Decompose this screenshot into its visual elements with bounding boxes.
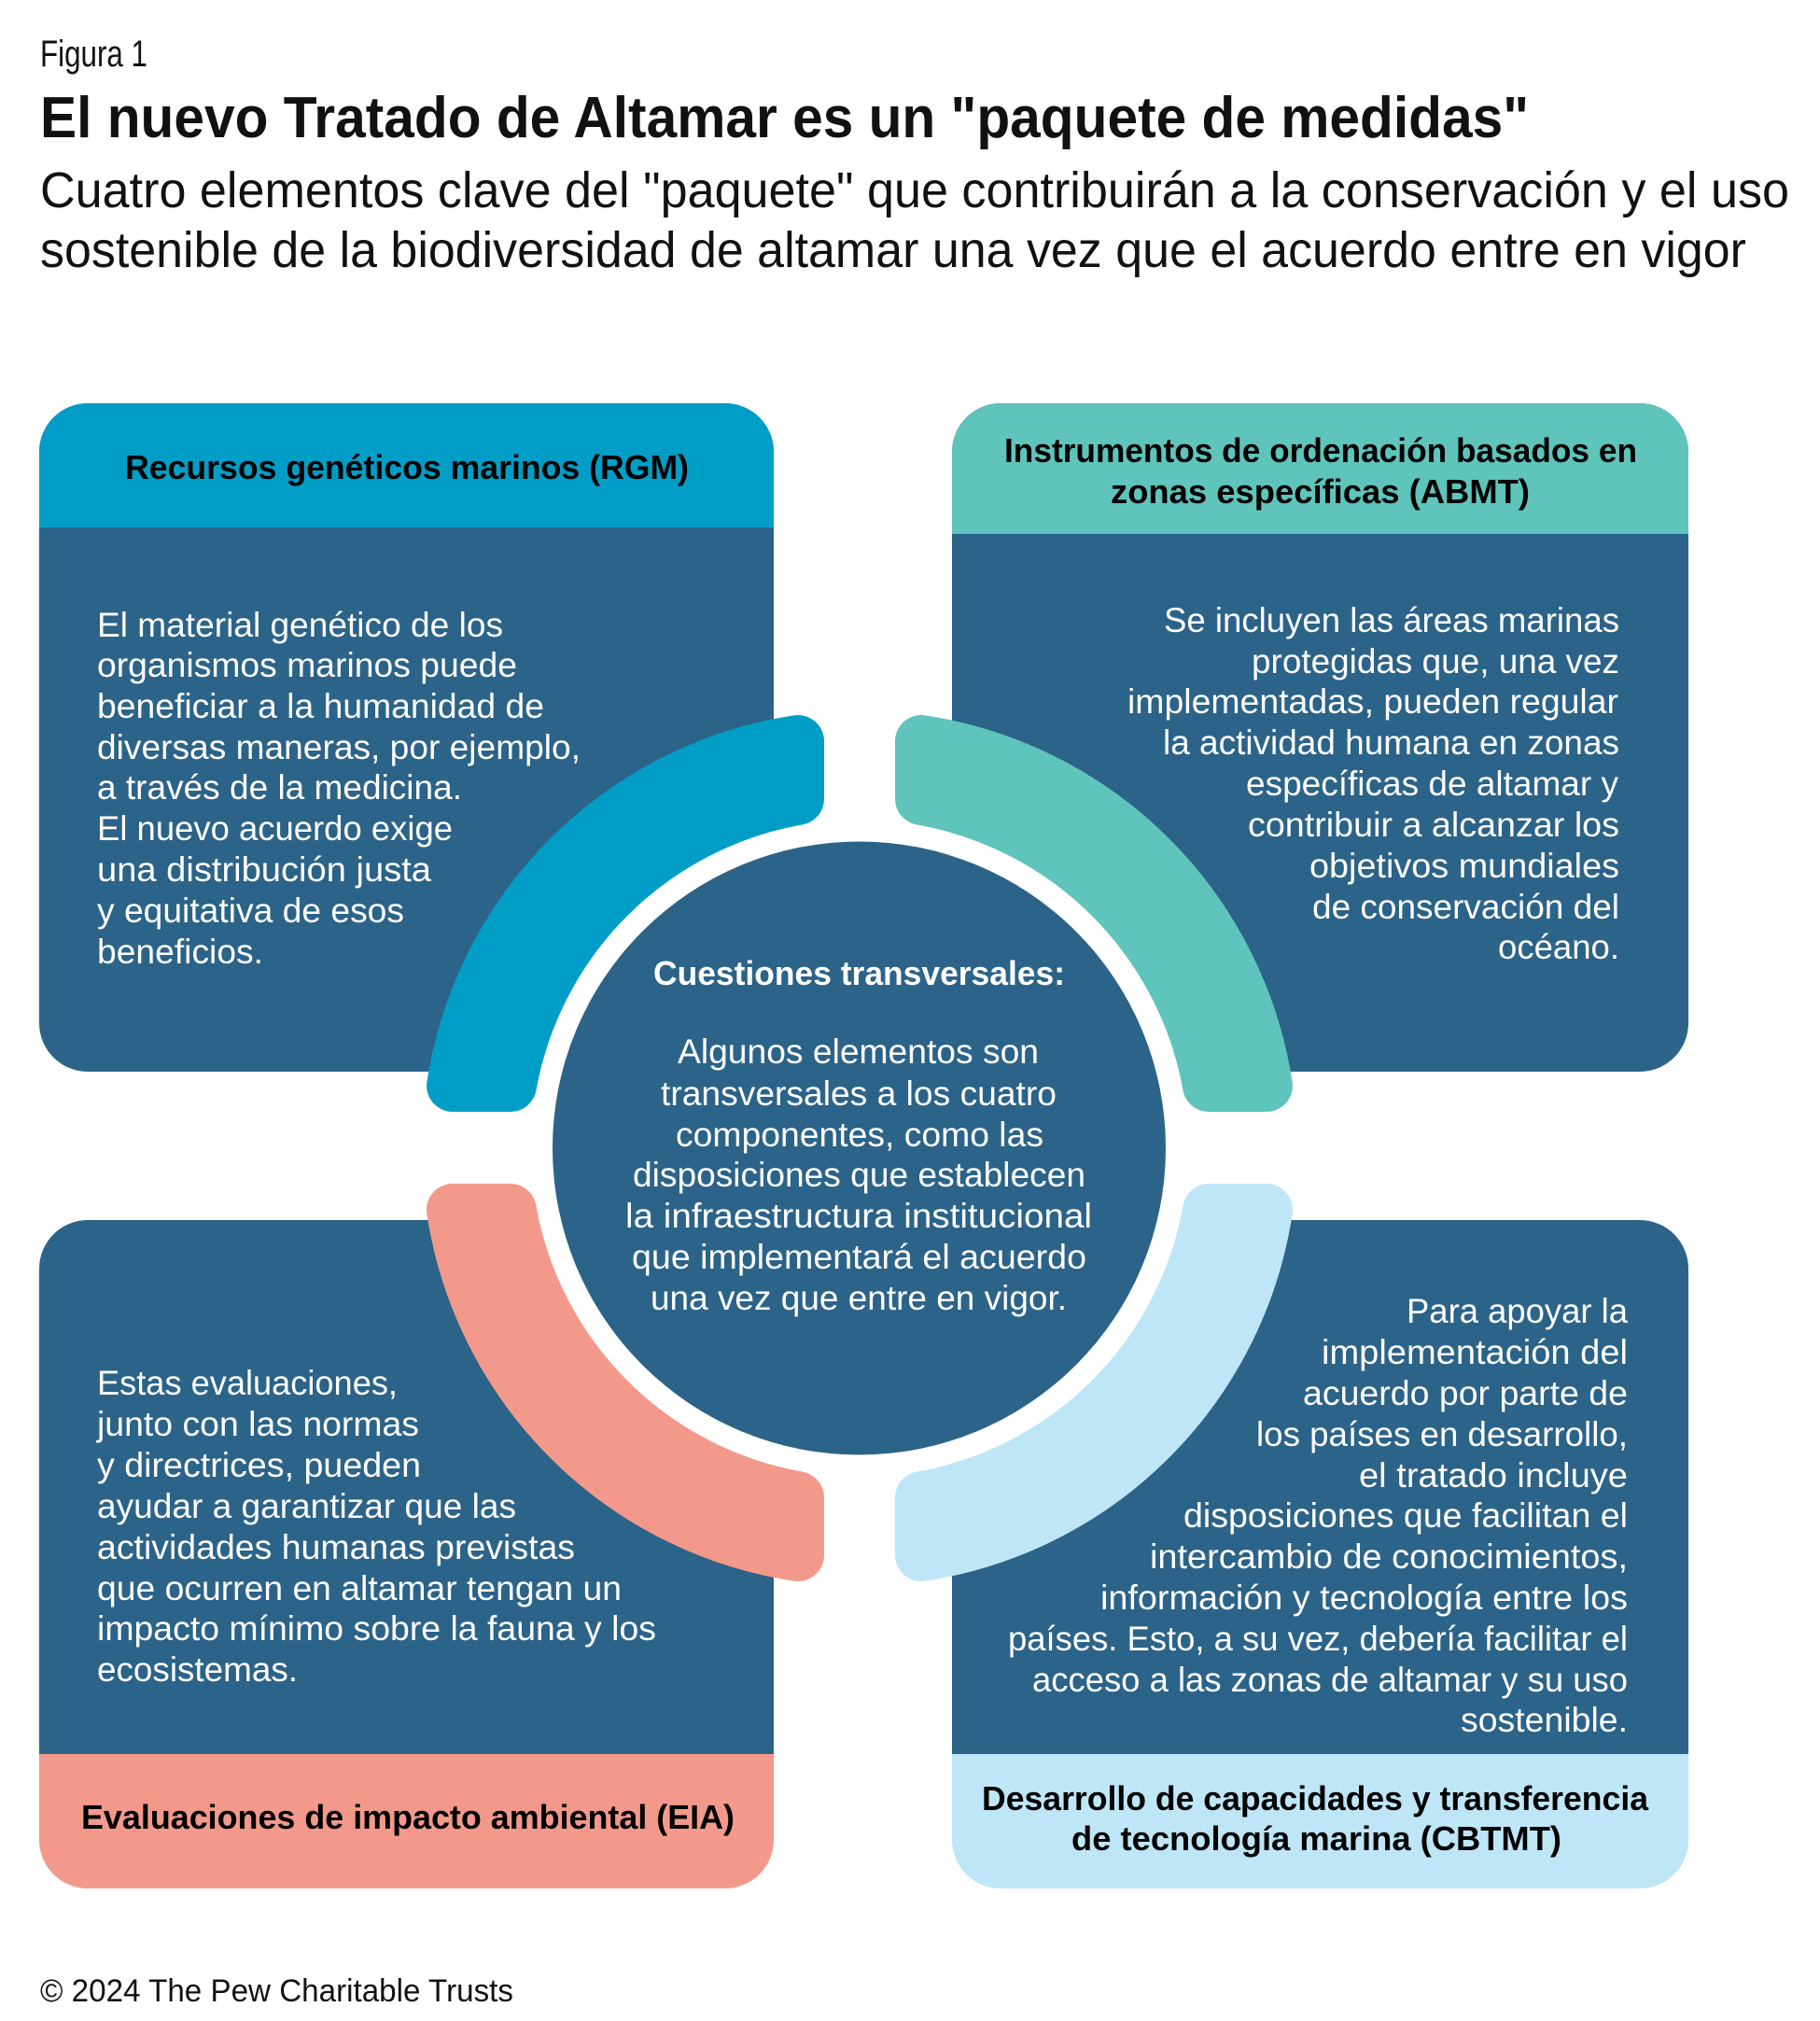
arc: salmon bbox=[453, 1210, 798, 1555]
text: ABMT body: protegidas que, una vez bbox=[1252, 642, 1619, 681]
text: center: la infraestructura institucional bbox=[625, 1197, 1092, 1235]
text: center: Cuestiones transversales: bbox=[653, 954, 1065, 992]
text: RGM body: beneficiar a la humanidad de bbox=[97, 687, 544, 725]
text: center bbox=[625, 954, 1092, 1317]
text: RGM body: organismos marinos puede bbox=[97, 646, 517, 684]
text: ABMT body: contribuir a alcanzar los bbox=[1248, 806, 1619, 844]
heading: CBTMT: Desarrollo de capacidades y transferencia bbox=[982, 1779, 1649, 1817]
text: CBTMT body: sostenible. bbox=[1461, 1701, 1628, 1739]
text: CBTMT body bbox=[1008, 1292, 1628, 1739]
text: ABMT body: de conservación del bbox=[1312, 888, 1619, 926]
arc: blue bbox=[453, 741, 798, 1086]
header: CBTMT bbox=[952, 1754, 1688, 1888]
header: EIA bbox=[39, 1754, 774, 1888]
text: CBTMT body: Para apoyar la bbox=[1407, 1292, 1628, 1330]
text: RGM body: El material genético de los bbox=[97, 606, 503, 644]
footer: copyright: © 2024 The Pew Charitable Trusts bbox=[40, 1973, 513, 2009]
text: ABMT body: la actividad humana en zonas bbox=[1163, 723, 1619, 762]
text: CBTMT body: información y tecnología entre los bbox=[1100, 1579, 1628, 1617]
arc: teal bbox=[921, 741, 1267, 1086]
panel: marine genetic resources bbox=[39, 403, 774, 1072]
text: CBTMT body: intercambio de conocimientos, bbox=[1150, 1537, 1628, 1576]
panel: capacity building bbox=[952, 1220, 1688, 1888]
text: center: transversales a los cuatro bbox=[661, 1074, 1057, 1113]
text: EIA body: actividades humanas previstas bbox=[97, 1528, 575, 1566]
text: RGM body: beneficios. bbox=[97, 933, 263, 971]
heading: ABMT: zonas específicas (ABMT) bbox=[1111, 472, 1530, 511]
heading: CBTMT bbox=[982, 1779, 1649, 1858]
text: EIA body: ayudar a garantizar que las bbox=[97, 1487, 516, 1525]
heading: CBTMT: de tecnología marina (CBTMT) bbox=[1071, 1819, 1561, 1858]
text: EIA body: ecosistemas. bbox=[97, 1650, 298, 1689]
panel: area-based management tools bbox=[952, 403, 1688, 1072]
title: El nuevo Tratado de Altamar es un "paquete de medidas" bbox=[40, 86, 1529, 150]
subtitle bbox=[40, 162, 1789, 278]
text: EIA body: impacto mínimo sobre la fauna y los bbox=[97, 1609, 656, 1648]
arc: light blue bbox=[921, 1210, 1267, 1555]
panel: environmental impact assessments bbox=[39, 1220, 774, 1888]
text: ABMT body: específicas de altamar y bbox=[1246, 765, 1618, 803]
center circle bbox=[553, 842, 1166, 1454]
ring segments bbox=[453, 741, 1267, 1555]
text: CBTMT body: acceso a las zonas de altamar y su uso bbox=[1032, 1661, 1628, 1699]
heading: ABMT bbox=[1004, 431, 1637, 511]
text: ABMT body: objetivos mundiales bbox=[1309, 847, 1619, 885]
white ring backing bbox=[528, 818, 1189, 1479]
text: RGM body: a través de la medicina. bbox=[97, 768, 462, 807]
text: EIA body: Estas evaluaciones, bbox=[97, 1364, 398, 1402]
heading: EIA: Evaluaciones de impacto ambiental (EIA) bbox=[81, 1798, 735, 1836]
text: center: que implementará el acuerdo bbox=[632, 1238, 1086, 1276]
text: EIA body: que ocurren en altamar tengan un bbox=[97, 1569, 622, 1607]
text: ABMT body: Se incluyen las áreas marinas bbox=[1164, 601, 1619, 639]
text: RGM body: El nuevo acuerdo exige bbox=[97, 809, 453, 848]
text: CBTMT body: implementación del bbox=[1322, 1333, 1628, 1371]
text: RGM body bbox=[97, 606, 581, 971]
subtitle: sostenible de la biodiversidad de altamar una vez que el acuerdo entre en vigor bbox=[40, 222, 1746, 278]
text: CBTMT body: acuerdo por parte de bbox=[1303, 1374, 1628, 1412]
text: EIA body bbox=[96, 1364, 656, 1689]
header: RGM bbox=[39, 403, 774, 527]
text: CBTMT body: los países en desarrollo, bbox=[1256, 1415, 1628, 1453]
heading: ABMT: Instrumentos de ordenación basados en bbox=[1004, 431, 1637, 470]
text: CBTMT body: el tratado incluye bbox=[1359, 1456, 1628, 1495]
text: CBTMT body: países. Esto, a su vez, debería facilitar el bbox=[1008, 1620, 1628, 1658]
text: center: una vez que entre en vigor. bbox=[651, 1279, 1067, 1317]
figure label: Figura 1 bbox=[40, 34, 147, 75]
text: EIA body: junto con las normas bbox=[96, 1405, 419, 1443]
text: CBTMT body: disposiciones que facilitan el bbox=[1183, 1496, 1628, 1535]
text: EIA body: y directrices, pueden bbox=[97, 1446, 421, 1484]
text: center: disposiciones que establecen bbox=[633, 1156, 1085, 1194]
text: center: Algunos elementos son bbox=[678, 1032, 1039, 1071]
text: RGM body: una distribución justa bbox=[97, 850, 431, 889]
text: ABMT body: océano. bbox=[1498, 928, 1619, 966]
subtitle: Cuatro elementos clave del "paquete" que contribuirán a la conservación y el uso bbox=[40, 162, 1789, 218]
text: ABMT body: implementadas, pueden regular bbox=[1127, 682, 1618, 721]
header: ABMT bbox=[952, 403, 1688, 534]
text: ABMT body bbox=[1127, 601, 1619, 966]
text: center: componentes, como las bbox=[676, 1116, 1043, 1154]
text: RGM body: diversas maneras, por ejemplo, bbox=[97, 728, 581, 766]
heading: RGM: Recursos genéticos marinos (RGM) bbox=[125, 448, 689, 486]
text: RGM body: y equitativa de esos bbox=[97, 891, 404, 930]
